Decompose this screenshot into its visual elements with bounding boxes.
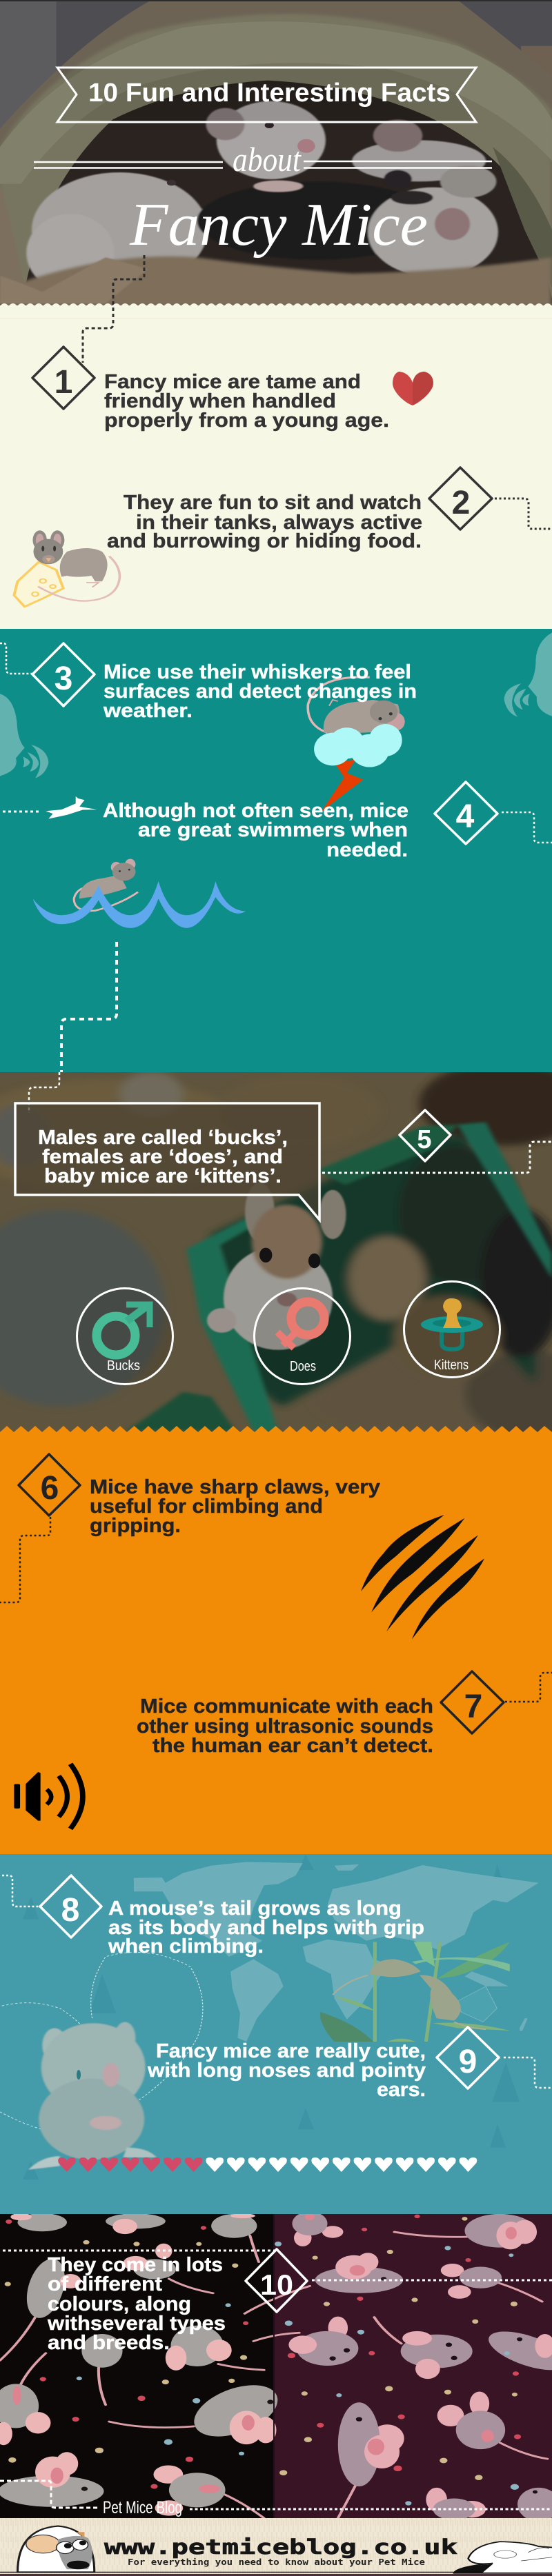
badge 2 [429, 467, 492, 530]
panel: cream section, facts 1 and 2 [0, 303, 552, 629]
icon: claw marks [361, 1515, 484, 1639]
text: fact 3: surfaces and detect changes in [103, 681, 417, 703]
badge 10: 10 [260, 2268, 293, 2301]
text: fact 2: in their tanks, always active [136, 512, 422, 534]
connector line to blog credit [0, 2481, 99, 2508]
connector line to badge 3 [0, 643, 32, 674]
text: fact 2: They are fun to sit and watch [124, 492, 422, 514]
illustration: mouse on waves [32, 859, 246, 928]
text: fact 2: and burrowing or hiding food. [107, 530, 422, 552]
connector line from badge 2 [495, 499, 552, 529]
connector line from badge 6 [0, 1517, 50, 1602]
subheading: about: about [233, 140, 302, 179]
text: fact 4 [103, 800, 408, 861]
text: fact 7: other using ultrasonic sounds [137, 1715, 433, 1738]
text: fact 8 [108, 1898, 424, 1958]
text: fact 3 [103, 661, 417, 722]
text: fact 9 [148, 2042, 426, 2096]
background photo: mouse in green tube [0, 1062, 552, 1438]
connector line from badge 10 [312, 2280, 552, 2281]
badge 9: 9 [459, 2044, 477, 2080]
text: fact 3: weather. [103, 700, 193, 722]
illustration: mouse with cheese [14, 530, 119, 607]
panel: header [0, 0, 552, 311]
badge 6: 6 [41, 1470, 59, 1507]
connector line from badge 4 [502, 812, 552, 843]
text: fact 9: ears. [377, 2079, 426, 2101]
hearts row: 7 of 20 [58, 2157, 477, 2172]
panel: photo section, fact 5 [0, 1062, 552, 1438]
badge 8 [40, 1875, 101, 1938]
subheading: about [34, 140, 492, 179]
badge 7 [441, 1671, 504, 1733]
badge 8: 8 [61, 1892, 79, 1929]
illustration: harvest mice on stems [320, 1942, 510, 2042]
footer tagline: For everything you need to know about your Pet Mice [128, 2557, 425, 2567]
icon: bucks [77, 1288, 172, 1385]
text: fact 6: gripping. [90, 1515, 181, 1537]
text: fact 7: the human ear can’t detect. [152, 1735, 433, 1757]
text: fact 8: A mouse’s tail grows as long [108, 1898, 402, 1920]
connector line from blog credit [190, 2508, 552, 2510]
text: fact 10: and breeds. [48, 2332, 170, 2354]
icon: head blowing, left [0, 694, 48, 778]
connector line from badge 5 [322, 1142, 552, 1173]
badge 5: 5 [417, 1125, 432, 1154]
badge 5 [400, 1110, 451, 1161]
text: fact 10: They come in lots [48, 2254, 223, 2276]
text: fact 7 [137, 1695, 433, 1757]
callout: baby mice are ‘kittens’. [44, 1165, 282, 1187]
badge 10 [246, 2249, 307, 2312]
text: fact 9: with long noses and pointy [147, 2060, 426, 2082]
text: fact 10: withseveral types [47, 2313, 226, 2335]
text: fact 4: are great swimmers when [138, 819, 408, 841]
connector line to fact 1 [83, 308, 113, 363]
text: fact 1 [104, 371, 389, 432]
panel: teal section, facts 3 and 4 [0, 629, 552, 1072]
connector line to swimmer [3, 811, 41, 812]
blog credit: Pet Mice Blog [103, 2498, 182, 2517]
text: fact 7: Mice communicate with each [140, 1695, 433, 1718]
icon: kittens [404, 1281, 500, 1378]
text: fact 10 [47, 2254, 226, 2354]
text: fact 9: Fancy mice are really cute, [156, 2040, 426, 2062]
connector line from header [113, 255, 144, 308]
text: fact 8: as its body and helps with grip [108, 1917, 424, 1939]
badge 3: 3 [55, 661, 72, 697]
heading: Fancy Mice: Fancy Mice [129, 192, 428, 259]
badge 9 [437, 2027, 499, 2089]
badge 1 [32, 347, 95, 409]
connector line from badge 7 [505, 1673, 552, 1702]
icon: kittens: Kittens [434, 1358, 469, 1373]
icon: speaker [14, 1764, 83, 1829]
badge 4: 4 [456, 798, 475, 835]
title ribbon [57, 68, 476, 122]
text: fact 10: colours, along [48, 2293, 191, 2315]
callout: females are ‘does’, and [42, 1146, 283, 1168]
text: fact 1: Fancy mice are tame and [104, 371, 361, 393]
text: fact 6: Mice have sharp claws, very [90, 1476, 380, 1498]
icon: swimmer [46, 796, 97, 819]
illustration: mouse on storm cloud [308, 677, 405, 812]
icon: does [254, 1288, 351, 1385]
scalloped edge [0, 303, 552, 308]
text: fact 6 [90, 1476, 380, 1537]
badge 4 [435, 782, 497, 844]
icon: does: Does [290, 1359, 316, 1374]
text: fact 3: Mice use their whiskers to feel [103, 661, 411, 683]
text: fact 4: Although not often seen, mice [103, 800, 408, 822]
text: fact 4: needed. [326, 839, 408, 861]
text: fact 1: properly from a young age. [104, 410, 389, 432]
panel: footer [0, 2518, 552, 2576]
panel: orange section, facts 6 and 7 [0, 1426, 552, 1854]
footer url: www.petmiceblog.co.uk [104, 2535, 457, 2559]
callout [15, 1103, 319, 1220]
text: fact 6: useful for climbing and [90, 1496, 323, 1518]
mascot: sleeping white mouse [454, 2542, 552, 2573]
panel: mice pattern section, fact 10 [0, 2211, 552, 2522]
text: fact 8: when climbing. [108, 1935, 264, 1958]
icon: head blowing, right [504, 632, 552, 717]
badge 6 [19, 1454, 80, 1516]
world map backdrop [134, 1862, 538, 2042]
illustration: cute grey mouse [28, 2022, 157, 2170]
badge 3 [32, 643, 95, 706]
badge 2: 2 [452, 485, 470, 521]
badge 1: 1 [55, 364, 72, 401]
connector line to badge 10 [3, 2249, 275, 2252]
title ribbon: 10 Fun and Interesting Facts [88, 79, 451, 108]
text: fact 2 [107, 492, 422, 552]
decorative dashed heart [0, 1952, 203, 2129]
background pattern: cartoon mice fabric [0, 2211, 552, 2522]
text: fact 10: of different [48, 2273, 162, 2295]
mascot: mouse in arch [18, 2526, 95, 2572]
background photo: mice in a log [0, 0, 552, 311]
panel: blue section, facts 8 and 9 [0, 1854, 552, 2214]
connector line from badge 9 [504, 2057, 552, 2088]
connector line to fact 5 [61, 942, 117, 1072]
icon: heart [393, 372, 433, 405]
text: fact 1: friendly when handled [104, 390, 336, 412]
callout: Males are called ‘bucks’, [38, 1127, 288, 1149]
connector line to badge 8 [2, 1875, 39, 1906]
badge 7: 7 [464, 1689, 482, 1725]
icon: bucks: Bucks [107, 1358, 140, 1373]
connector line into callout [29, 1072, 59, 1113]
